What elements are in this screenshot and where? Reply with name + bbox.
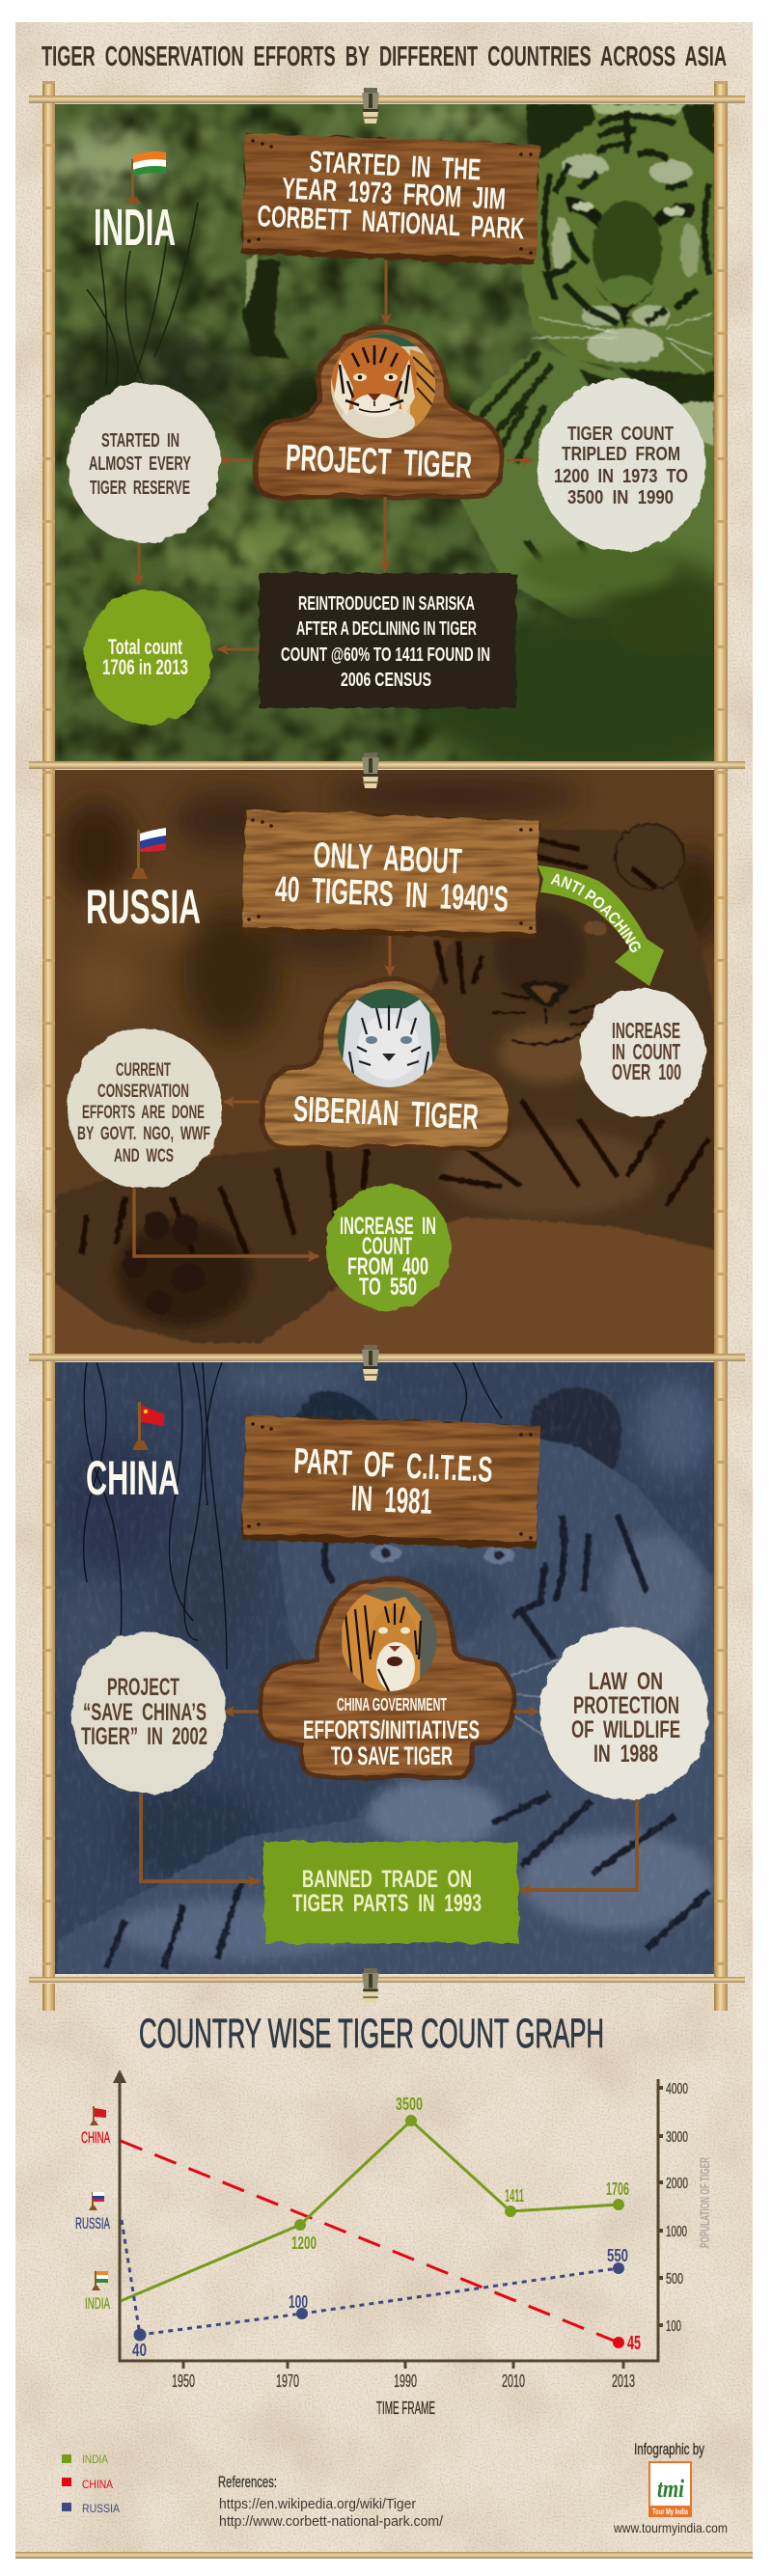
right axis labels: 4000 bbox=[666, 2081, 688, 2097]
hanging vines bbox=[84, 1362, 502, 1669]
China government wood badge: CHINA GOVERNMENT bbox=[337, 1695, 447, 1714]
lantern ornaments bbox=[362, 88, 379, 2003]
bubble: tripled count: 1200 IN 1973 TO bbox=[554, 466, 688, 487]
tiger bbox=[55, 824, 714, 1343]
photo: standing tiger bbox=[338, 1584, 440, 1694]
flag label: Russia: RUSSIA bbox=[75, 2214, 110, 2233]
series: Russia: 100 bbox=[289, 2292, 308, 2312]
green circle: increase 400 to 550 bbox=[325, 1185, 451, 1310]
series: China: 45 bbox=[627, 2333, 641, 2354]
series: Russia: 550 bbox=[607, 2246, 628, 2265]
series: India: 3500 bbox=[396, 2095, 423, 2114]
logo: Tour My India bbox=[649, 2462, 691, 2516]
series: China bbox=[121, 2141, 641, 2354]
bubble: almost every reserve: ALMOST EVERY bbox=[89, 453, 191, 475]
right axis labels: 100 bbox=[666, 2318, 681, 2335]
green circle: increase 400 to 550: INCREASE IN bbox=[340, 1213, 436, 1240]
logo: Tour My India: tmi bbox=[657, 2475, 685, 2503]
green circle: increase 400 to 550: FROM 400 bbox=[347, 1253, 428, 1280]
dark tail band bbox=[243, 253, 290, 359]
dark box: Sariska bbox=[259, 573, 516, 708]
bubble: almost every reserve bbox=[68, 383, 220, 543]
plank: part of CITES bbox=[241, 1415, 540, 1548]
plank: part of CITES: IN 1981 bbox=[350, 1478, 433, 1521]
arrow: to dark box bbox=[384, 497, 386, 571]
bubble: tripled count: TRIPLED FROM bbox=[562, 444, 680, 465]
flag label: Russia bbox=[75, 2192, 110, 2233]
bubble: almost every reserve: TIGER RESERVE bbox=[90, 478, 190, 499]
green circle: total count bbox=[85, 589, 212, 725]
elbow arrow: right bubble to ban box bbox=[520, 1799, 637, 1890]
x axis labels: 2010 bbox=[502, 2371, 525, 2391]
flag label: India: INDIA bbox=[85, 2294, 110, 2313]
bubble: save China's tiger bbox=[71, 1631, 226, 1794]
bubble: current conservation: CURRENT bbox=[116, 1060, 171, 1081]
blurred background bbox=[48, 1360, 714, 1881]
bubble: tripled count bbox=[538, 379, 705, 551]
dark box: Sariska: 2006 CENSUS bbox=[341, 670, 431, 691]
plank: only about 40 tigers: ONLY ABOUT bbox=[313, 835, 463, 881]
green circle: increase 400 to 550: TO 550 bbox=[359, 1274, 417, 1301]
ribbon arrow: anti poaching: ANTI POACHING bbox=[550, 874, 641, 953]
series: India bbox=[121, 2095, 629, 2301]
logo: Tour My India: Tour My India bbox=[652, 2507, 688, 2516]
blurred background bbox=[58, 775, 724, 1042]
plank: started in 1973: CORBETT NATIONAL PARK bbox=[257, 199, 526, 246]
credit: Infographic by bbox=[613, 2440, 728, 2535]
project tiger wood badge bbox=[255, 327, 503, 497]
bubble: current conservation bbox=[68, 1028, 222, 1189]
references: https://en.wikipedia.org/wiki/Tiger bbox=[219, 2496, 416, 2512]
ribbon arrow: anti poaching bbox=[538, 865, 664, 986]
bubble: tripled count: 3500 IN 1990 bbox=[567, 487, 674, 508]
arrow: to left bubble bbox=[219, 459, 251, 461]
arrow: bubble to total count bbox=[137, 543, 141, 585]
right axis labels: 3000 bbox=[666, 2129, 688, 2146]
credit: Infographic by: www.tourmyindia.com bbox=[613, 2520, 728, 2535]
right axis labels bbox=[666, 2081, 688, 2335]
references: References: bbox=[218, 2473, 277, 2491]
country name: India: INDIA bbox=[94, 199, 176, 257]
arrow: plank to Siberian tiger bbox=[388, 936, 392, 975]
panel: China bbox=[48, 1360, 714, 1974]
series: India: 1411 bbox=[505, 2186, 524, 2206]
legend bbox=[62, 2453, 120, 2515]
x axis labels: 2013 bbox=[612, 2371, 635, 2391]
credit: Infographic by: Infographic by bbox=[634, 2440, 704, 2458]
bubble: law on protection: PROTECTION bbox=[573, 1692, 679, 1719]
plank: only about 40 tigers: 40 TIGERS IN 1940'S bbox=[274, 869, 510, 919]
bubble: current conservation: AND WCS bbox=[114, 1146, 174, 1166]
x axis labels bbox=[172, 2371, 635, 2391]
dark box: Sariska: AFTER A DECLINING IN TIGER bbox=[296, 618, 477, 640]
series: Russia: 40 bbox=[132, 2341, 147, 2360]
photo: Bengal tiger bbox=[328, 333, 439, 441]
country name: China: CHINA bbox=[86, 1451, 179, 1505]
China government wood badge: EFFORTS/INITIATIVES bbox=[303, 1715, 480, 1744]
legend: INDIA bbox=[82, 2453, 108, 2466]
ground shade bbox=[407, 548, 714, 761]
line chart bbox=[75, 2069, 712, 2418]
bubble: current conservation: CONSERVATION bbox=[97, 1082, 189, 1102]
bubble: law on protection: OF WILDLIFE bbox=[571, 1716, 680, 1743]
flag: China bbox=[132, 1402, 164, 1450]
references: http://www.corbett-national-park.com/ bbox=[219, 2513, 444, 2530]
right axis labels: 500 bbox=[666, 2271, 683, 2288]
right axis labels: 2000 bbox=[666, 2176, 688, 2192]
Siberian tiger wood badge bbox=[261, 979, 510, 1148]
legend: CHINA bbox=[82, 2478, 113, 2491]
country name: Russia: RUSSIA bbox=[86, 880, 201, 934]
series: India: 1706 bbox=[606, 2179, 629, 2199]
elbow arrow: to increase in count bbox=[134, 1189, 318, 1256]
arrow: to law bubble bbox=[513, 1710, 538, 1713]
green box: banned trade bbox=[264, 1842, 518, 1943]
green circle: increase 400 to 550: COUNT bbox=[362, 1233, 412, 1260]
legend: RUSSIA bbox=[82, 2502, 120, 2515]
green box: banned trade: BANNED TRADE ON bbox=[302, 1866, 472, 1893]
bubble: law on protection: LAW ON bbox=[589, 1668, 663, 1695]
plank: started in 1973: YEAR 1973 FROM JIM bbox=[281, 171, 507, 216]
references bbox=[218, 2473, 444, 2530]
chart axes bbox=[120, 2079, 663, 2369]
dark plants bbox=[87, 203, 198, 386]
plank: part of CITES: PART OF C.I.T.E.S bbox=[293, 1440, 493, 1490]
flag: Russia bbox=[131, 828, 166, 879]
bubble: current conservation: EFFORTS ARE DONE bbox=[82, 1103, 205, 1123]
bubble: save China's tiger: “SAVE CHINA’S bbox=[83, 1699, 207, 1726]
bubble: increase over 100 bbox=[580, 988, 705, 1117]
bubble: save China's tiger: TIGER” IN 2002 bbox=[81, 1723, 207, 1750]
x axis labels: 1990 bbox=[394, 2371, 417, 2391]
green circle: total count: Total count bbox=[108, 635, 182, 659]
series: India: 1200 bbox=[291, 2233, 317, 2253]
green circle: total count: 1706 in 2013 bbox=[102, 655, 188, 679]
arrow: dark box to total count bbox=[218, 648, 259, 650]
China government wood badge: TO SAVE TIGER bbox=[331, 1741, 453, 1770]
project tiger wood badge: PROJECT TIGER bbox=[285, 438, 473, 486]
panel: Russia bbox=[55, 770, 724, 1354]
photo: white tiger bbox=[336, 986, 442, 1090]
arrow: to save China's tiger bubble bbox=[224, 1710, 259, 1713]
tiger body bbox=[461, 347, 714, 617]
y axis arrowhead bbox=[113, 2069, 126, 2083]
dark box: Sariska: REINTRODUCED IN SARISKA bbox=[298, 593, 475, 615]
flag label: China: CHINA bbox=[81, 2128, 110, 2147]
x axis labels: 1970 bbox=[276, 2371, 299, 2391]
flag label: India bbox=[85, 2271, 110, 2313]
bubble: increase over 100: INCREASE bbox=[612, 1018, 680, 1043]
tiger head bbox=[521, 104, 714, 376]
bubble: law on protection: IN 1988 bbox=[593, 1740, 658, 1768]
plank: started in 1973: STARTED IN THE bbox=[309, 145, 482, 186]
arrow: to conservation bubble bbox=[224, 1100, 259, 1104]
tiger bbox=[58, 1387, 714, 1974]
flag: India bbox=[124, 151, 166, 204]
bubble: almost every reserve: STARTED IN bbox=[101, 430, 179, 452]
bubble: increase over 100: IN COUNT bbox=[612, 1039, 680, 1064]
bubble: current conservation: BY GOVT. NGO, WWF bbox=[77, 1124, 210, 1144]
flag label: China bbox=[81, 2106, 110, 2147]
bubble: increase over 100: OVER 100 bbox=[612, 1059, 681, 1084]
bubble: law on protection bbox=[540, 1628, 708, 1799]
plank: only about 40 tigers bbox=[242, 809, 539, 939]
elbow arrow: left bubble to ban box bbox=[141, 1794, 259, 1881]
fur grain bbox=[55, 1362, 714, 1974]
y axis title: POPULATION OF TIGER bbox=[697, 2157, 712, 2248]
green box: banned trade: TIGER PARTS IN 1993 bbox=[292, 1890, 482, 1917]
x axis title: TIME FRAME bbox=[376, 2398, 435, 2418]
plank: started in 1973 bbox=[241, 133, 539, 265]
arrow: plank to project tiger bbox=[384, 260, 388, 324]
bubble: tripled count: TIGER COUNT bbox=[567, 424, 674, 445]
series: Russia bbox=[122, 2220, 628, 2360]
bubble: save China's tiger: PROJECT bbox=[107, 1674, 179, 1701]
arrow: to right bubble bbox=[507, 459, 533, 461]
Siberian tiger wood badge: SIBERIAN TIGER bbox=[292, 1089, 480, 1137]
dark box: Sariska: COUNT @60% TO 1411 FOUND IN bbox=[281, 644, 490, 666]
panel: India bbox=[55, 104, 714, 761]
x axis labels: 1950 bbox=[172, 2371, 195, 2391]
ground bbox=[55, 1196, 714, 1354]
China government wood badge bbox=[261, 1578, 513, 1777]
foliage background bbox=[48, 101, 511, 758]
right axis labels: 1000 bbox=[666, 2224, 687, 2240]
